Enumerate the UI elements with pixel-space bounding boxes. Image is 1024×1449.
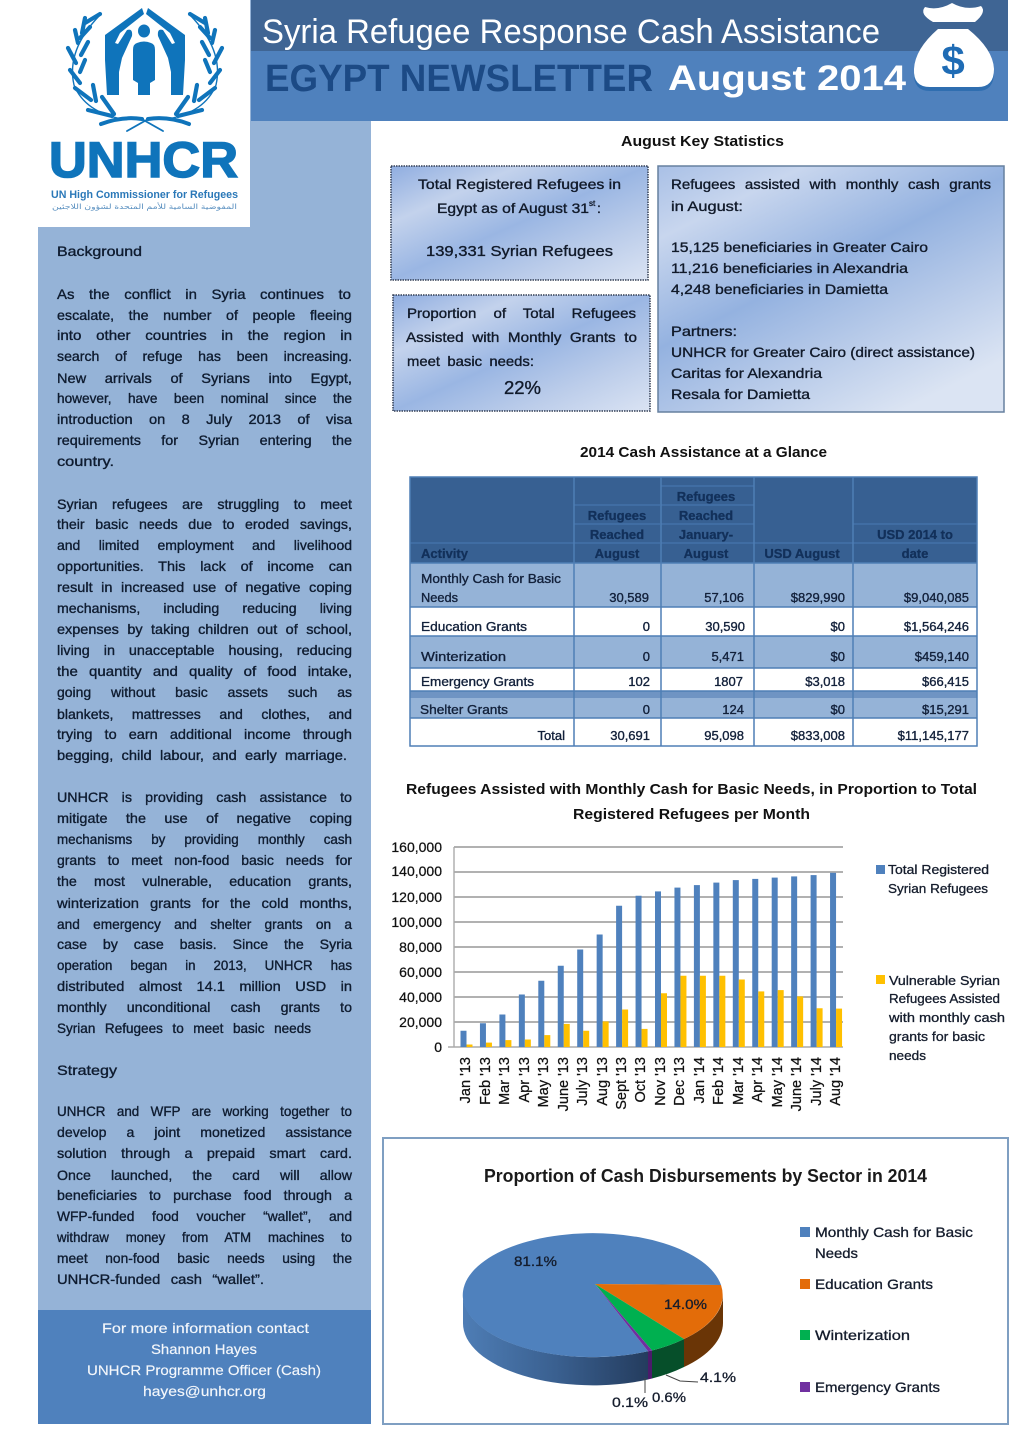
table row: Monthly Cash for Basic Needs: Monthly Cash for Basic: [421, 571, 562, 586]
sidebar text: strategy paragraph: solution through a prepaid smart card.: [57, 1145, 352, 1161]
logo wordmark: UNHCR: [49, 132, 238, 188]
sidebar text: background paragraph: search of refuge has been increasing.: [57, 348, 352, 364]
pie chart title: Proportion of Cash Disbursements by Sector in 2014: [484, 1166, 927, 1186]
sidebar text: refugees struggling paragraph: begging, child labour, and early marriage.: [57, 747, 347, 763]
x axis month labels: Oct '13: [633, 1057, 649, 1102]
sidebar text: refugees struggling paragraph: trying to earn additional income through: [57, 726, 352, 742]
x axis month labels: June '14: [789, 1057, 805, 1111]
table row: Winterization: Winterization: [421, 649, 506, 664]
bar chart legend: Refugees Assisted: [889, 991, 1000, 1006]
sidebar text: UNHCR cash assistance paragraph: [56, 789, 352, 1036]
section heading: August Key Statistics: August Key Statistics: [621, 133, 784, 150]
y axis labels: 20,000: [399, 1014, 442, 1030]
table header row: Refugees: [588, 508, 646, 523]
y axis labels: 80,000: [399, 939, 442, 955]
x axis month labels: June '13: [556, 1057, 572, 1111]
title: Syria Refugee Response Cash Assistance: Syria Refugee Response Cash Assistance: [262, 13, 880, 51]
panel: proportion assisted: Assisted with Monthly Grants to: [406, 329, 637, 345]
panel: cash disbursements pie chart: [383, 1138, 1008, 1424]
panel: proportion assisted: 22%: [504, 378, 541, 398]
sidebar text: refugees struggling paragraph: their basic needs due to eroded savings,: [57, 516, 352, 532]
panel: left sidebar: [38, 0, 371, 1424]
x axis month labels: Apr '13: [517, 1057, 533, 1102]
table row: Winterization: $0: [831, 649, 845, 664]
table row: Emergency Grants: 102: [628, 674, 650, 689]
table row: Education Grants: $0: [831, 619, 845, 634]
sidebar text: UNHCR cash assistance paragraph: grants to meet non-food basic needs for: [57, 852, 352, 868]
table header row: January-: [679, 527, 733, 542]
panel: proportion assisted: Proportion of Total Refugees: [407, 305, 636, 321]
pie legend: Emergency Grants: [815, 1379, 940, 1395]
chart title: refugees assisted: Registered Refugees per Month: [573, 806, 810, 823]
sidebar text: background paragraph: New arrivals of Syrians into Egypt,: [57, 370, 352, 386]
table header row: Reached: [679, 508, 733, 523]
table row: Winterization: 5,471: [711, 649, 744, 664]
y axis labels: 120,000: [391, 889, 442, 905]
y axis labels: 40,000: [399, 989, 442, 1005]
panel: contact footer: [38, 1310, 371, 1424]
pie legend: Education Grants: [815, 1276, 933, 1292]
panel: refugees assisted in August: 11,216 beneficiaries in Alexandria: [671, 260, 908, 276]
bar chart legend: Syrian Refugees: [888, 881, 989, 896]
table row: Total: $11,145,177: [898, 728, 969, 743]
chart title: refugees assisted: Refugees Assisted with Monthly Cash for Basic Needs, in Proportion to Total: [406, 781, 977, 798]
sidebar text: refugees struggling paragraph: going without basic assets such as: [57, 684, 352, 700]
panel: refugees assisted in August: Caritas for Alexandria: [671, 365, 822, 381]
sidebar text: strategy paragraph: meet non-food basic needs using the: [57, 1250, 352, 1266]
y axis labels: 140,000: [391, 863, 442, 879]
table row: Shelter Grants: $15,291: [922, 702, 969, 717]
panel: total registered refugees: Total Registered Refugees in: [418, 176, 621, 192]
table row: Education Grants: $1,564,246: [904, 619, 969, 634]
sidebar text: UNHCR cash assistance paragraph: Syrian Refugees to meet basic needs: [57, 1020, 311, 1036]
x axis month labels: July '13: [575, 1057, 591, 1106]
bar chart: registered vs assisted refugees: [391, 839, 844, 1111]
pie labels: 4.1%: [700, 1369, 736, 1385]
panel: refugees assisted in August: Partners:: [671, 323, 737, 339]
pie legend: Monthly Cash for Basic: [815, 1224, 973, 1240]
sidebar text: UNHCR cash assistance paragraph: operation began in 2013, UNHCR has: [57, 957, 352, 973]
x axis month labels: Jan '13: [458, 1057, 474, 1103]
table row: Winterization: 0: [643, 649, 650, 664]
table header row: date: [902, 546, 928, 561]
sidebar text: strategy paragraph: withdraw money from ATM machines to: [56, 1229, 352, 1245]
bar chart legend: [876, 862, 1005, 1063]
bar chart legend: with monthly cash: [888, 1010, 1005, 1025]
bar chart legend: grants for basic: [889, 1029, 986, 1044]
bar chart legend: Vulnerable Syrian: [889, 973, 1000, 988]
sidebar text: strategy paragraph: UNHCR-funded cash “wallet”.: [57, 1271, 264, 1287]
table row: Education Grants: Education Grants: [421, 619, 528, 634]
x axis month labels: Jan '14: [692, 1057, 708, 1103]
table row: Monthly Cash for Basic Needs: [421, 571, 969, 605]
table header row: August: [595, 546, 640, 561]
sidebar text: background paragraph: escalate, the number of people fleeing: [57, 307, 352, 323]
sidebar text: UNHCR cash assistance paragraph: distributed almost 14.1 million USD in: [57, 978, 352, 994]
x axis month labels: Dec '13: [672, 1057, 688, 1106]
sidebar text: UNHCR cash assistance paragraph: mechanisms by providing monthly cash: [57, 831, 352, 847]
sidebar text: refugees struggling paragraph: Syrian refugees are struggling to meet: [57, 496, 352, 512]
panel: refugees assisted in August: 4,248 beneficiaries in Damietta: [671, 281, 888, 297]
sidebar text: refugees struggling paragraph: [57, 496, 352, 763]
table header row: USD August: [764, 546, 840, 561]
pie labels: 81.1%: [514, 1253, 557, 1269]
sidebar text: background paragraph: As the conflict in Syria continues to: [57, 286, 351, 302]
sidebar text: refugees struggling paragraph: blankets, mattresses and clothes, and: [57, 706, 352, 722]
table header row: Refugees: [677, 489, 735, 504]
sidebar text: UNHCR cash assistance paragraph: and emergency and shelter grants on a: [57, 916, 352, 932]
sidebar text: background paragraph: introduction on 8 July 2013 of visa: [57, 411, 352, 427]
pie labels: 14.0%: [664, 1296, 707, 1312]
panel: refugees assisted in August: UNHCR for Greater Cairo (direct assistance): [671, 344, 975, 360]
table row: Shelter Grants: Shelter Grants: [420, 702, 509, 717]
bar chart legend: Total Registered: [888, 862, 989, 877]
x axis month labels: Apr '14: [750, 1057, 766, 1102]
sidebar text: strategy paragraph: [56, 1103, 353, 1287]
panel: refugees assisted in August: Refugees assisted with monthly cash grants: [671, 176, 991, 192]
sidebar text: strategy paragraph: WFP-funded food voucher “wallet”, and: [57, 1208, 352, 1224]
table row: Winterization: [421, 649, 969, 664]
panel: contact footer: For more information contact: [102, 1320, 309, 1336]
title: August 2014: August 2014: [668, 59, 907, 98]
table header row: August: [684, 546, 729, 561]
pie legend: [800, 1224, 973, 1395]
sidebar text: UNHCR cash assistance paragraph: monthly unconditional cash grants to: [57, 999, 352, 1015]
logo tagline: [51, 189, 238, 211]
panel: refugees assisted in August: in August:: [671, 198, 743, 214]
sidebar text: background paragraph: however, have been nominal since the: [57, 390, 352, 406]
table header row: Activity: [421, 546, 469, 561]
table row: Total: Total: [538, 728, 565, 743]
icon: sheltering hands and person: [105, 8, 185, 95]
x axis month labels: July '14: [809, 1057, 825, 1106]
pie labels: 0.6%: [652, 1389, 686, 1405]
icon: laurel wreath: [68, 14, 222, 131]
logo tagline: المفوضية السامية للأمم المتحدة لشؤون اللاجئين: [52, 202, 237, 211]
panel: contact footer: UNHCR Programme Officer (Cash): [87, 1362, 321, 1378]
panel: contact footer: Shannon Hayes: [151, 1341, 257, 1357]
sidebar text: strategy paragraph: UNHCR and WFP are working together to: [57, 1103, 352, 1119]
pie legend: Needs: [815, 1245, 858, 1261]
sidebar text: UNHCR cash assistance paragraph: case by case basis. Since the Syria: [57, 936, 352, 952]
sidebar text: refugees struggling paragraph: and limited employment and livelihood: [57, 537, 352, 553]
sidebar text: background paragraph: country.: [57, 453, 114, 469]
table row: Shelter Grants: $0: [831, 702, 845, 717]
table row: Total: $833,008: [791, 728, 845, 743]
x axis month labels: May '14: [770, 1057, 786, 1107]
sidebar text: background heading: Background: [57, 243, 142, 259]
table row: Total: 95,098: [704, 728, 744, 743]
table row: Education Grants: 0: [643, 619, 650, 634]
sidebar text: refugees struggling paragraph: result in increased use of negative coping: [57, 579, 352, 595]
panel: proportion assisted: meet basic needs:: [407, 353, 534, 369]
sidebar text: UNHCR cash assistance paragraph: mitigate the use of negative coping: [57, 810, 352, 826]
pie legend: Winterization: [815, 1327, 910, 1343]
sidebar text: strategy paragraph: beneficiaries to purchase food through a: [57, 1187, 352, 1203]
panel: total registered refugees: Egypt as of August 31: [437, 200, 589, 216]
table header row: Reached: [590, 527, 644, 542]
logo tagline: UN High Commissioner for Refugees: [51, 189, 238, 201]
table row: Total: [538, 728, 969, 743]
sidebar text: refugees struggling paragraph: expenses by taking children out of school,: [57, 621, 352, 637]
x axis month labels: Aug '13: [595, 1057, 611, 1106]
blue bars: total registered: [460, 873, 836, 1047]
table row: Monthly Cash for Basic Needs: Needs: [421, 590, 458, 605]
section heading: 2014 Cash Assistance at a Glance: 2014 Cash Assistance at a Glance: [580, 444, 827, 461]
sidebar text: refugees struggling paragraph: opportunities. This lack of income can: [57, 558, 352, 574]
table row: Monthly Cash for Basic Needs: $9,040,085: [904, 590, 969, 605]
x axis month labels: Nov '13: [653, 1057, 669, 1106]
x axis month labels: Mar '13: [497, 1057, 513, 1105]
sidebar text: strategy paragraph: Once launched, the card will allow: [57, 1167, 353, 1183]
table row: Monthly Cash for Basic Needs: $829,990: [791, 590, 845, 605]
sidebar text: strategy heading: Strategy: [57, 1062, 117, 1078]
table row: Emergency Grants: [421, 674, 969, 689]
y axis labels: 0: [434, 1039, 442, 1055]
panel: proportion assisted: [393, 295, 650, 411]
table row: Monthly Cash for Basic Needs: 30,589: [609, 590, 649, 605]
table row: Emergency Grants: 1807: [714, 674, 743, 689]
icon: money bag: $: [941, 37, 965, 84]
panel: total registered refugees: :: [597, 200, 601, 216]
x axis month labels: May '13: [536, 1057, 552, 1107]
sidebar text: strategy paragraph: develop a joint monetized assistance: [57, 1124, 352, 1140]
sidebar text: refugees struggling paragraph: the quantity and quality of food intake,: [57, 663, 352, 679]
y axis labels: 100,000: [391, 914, 442, 930]
panel: refugees assisted in August: 15,125 beneficiaries in Greater Cairo: [671, 239, 928, 255]
x axis month labels: Feb '13: [478, 1057, 494, 1105]
table row: Emergency Grants: $66,415: [922, 674, 969, 689]
table row: Shelter Grants: [420, 702, 969, 717]
sidebar text: background paragraph: requirements for Syrian entering the: [57, 432, 352, 448]
table row: Emergency Grants: Emergency Grants: [421, 674, 535, 689]
x axis month labels: Sept '13: [614, 1057, 630, 1110]
panel: total registered refugees: st: [589, 199, 596, 208]
x axis month labels: Aug '14: [828, 1057, 844, 1106]
panel: refugees assisted in August: [658, 166, 1004, 412]
table row: Education Grants: 30,590: [705, 619, 745, 634]
sidebar text: UNHCR cash assistance paragraph: UNHCR is providing cash assistance to: [57, 789, 352, 805]
y axis labels: 160,000: [391, 839, 442, 855]
sidebar text: refugees struggling paragraph: mechanisms, including reducing living: [57, 600, 352, 616]
table header row: [421, 489, 953, 561]
header banner: [251, 0, 1008, 121]
sidebar text: UNHCR cash assistance paragraph: winterization grants for the cold months,: [56, 895, 352, 911]
sidebar text: background paragraph: [57, 286, 352, 469]
table row: Total: 30,691: [610, 728, 650, 743]
table row: Shelter Grants: 0: [643, 702, 650, 717]
table: cash assistance: [410, 477, 977, 746]
table header row: USD 2014 to: [877, 527, 953, 542]
table row: Emergency Grants: $3,018: [805, 674, 845, 689]
icon: money bag: [914, 3, 994, 91]
title: Egypt Newsletter: EGYPT NEWSLETTER: [265, 58, 653, 100]
table row: Shelter Grants: 124: [722, 702, 744, 717]
pie labels: 0.1%: [612, 1394, 648, 1410]
3D pie chart: [463, 1233, 736, 1410]
sidebar text: UNHCR cash assistance paragraph: the most vulnerable, education grants,: [57, 873, 352, 889]
pie labels: [514, 1253, 736, 1410]
table row: Winterization: $459,140: [915, 649, 969, 664]
y axis labels: [391, 839, 442, 1055]
panel: contact footer: hayes@unhcr.org: [143, 1383, 266, 1399]
y axis labels: 60,000: [399, 964, 442, 980]
sidebar text: refugees struggling paragraph: living in unacceptable housing, reducing: [57, 642, 352, 658]
panel: refugees assisted in August: Resala for Damietta: [671, 386, 810, 402]
logo: UNHCR: [38, 0, 250, 227]
table row: Monthly Cash for Basic Needs: 57,106: [704, 590, 744, 605]
panel: total registered refugees: 139,331 Syrian Refugees: [426, 243, 613, 260]
x axis month labels: [458, 1057, 844, 1111]
sidebar text: background paragraph: into other countries in the region in: [57, 327, 352, 343]
yellow bars: assisted: [466, 976, 842, 1047]
x axis month labels: Mar '14: [731, 1057, 747, 1105]
chart title: refugees assisted: [406, 781, 977, 823]
bar chart legend: needs: [889, 1048, 927, 1063]
panel: total registered refugees: [391, 166, 648, 280]
table row: Education Grants: [421, 619, 969, 634]
x axis month labels: Feb '14: [711, 1057, 727, 1105]
